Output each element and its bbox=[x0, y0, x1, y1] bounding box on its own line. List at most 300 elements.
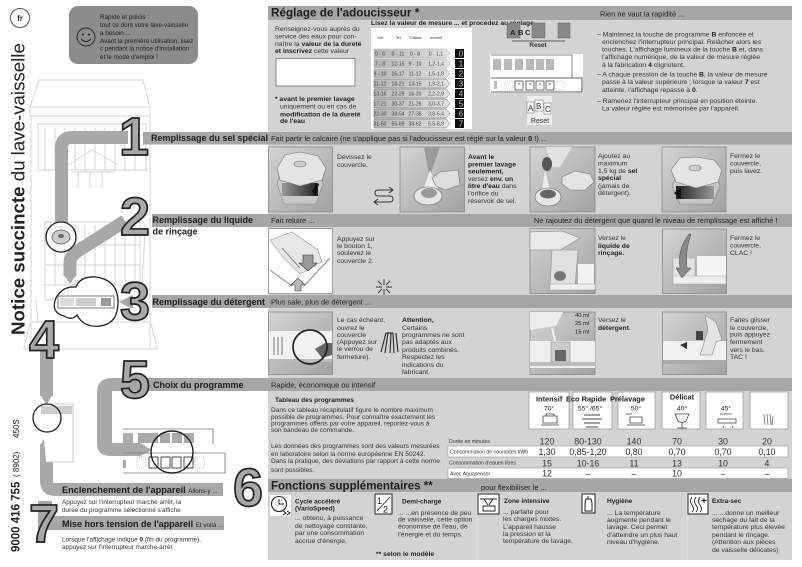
program data table: Durée en minutes bbox=[449, 439, 490, 445]
step: power off: Mise hors tension de l'appareil Et voilà ... bbox=[62, 519, 224, 529]
hardness table: 18-21 bbox=[391, 82, 405, 88]
part number: ( 8902) bbox=[12, 451, 21, 477]
text: close lid bbox=[730, 235, 761, 257]
program cards bbox=[529, 392, 788, 429]
text: add water: seulement, bbox=[468, 168, 504, 176]
hardness table: 5 bbox=[459, 100, 464, 108]
function: hygiène: ... La température bbox=[607, 510, 661, 517]
hardness table: 6 bbox=[459, 110, 464, 118]
photo: measure detergent: 40 ml bbox=[575, 313, 589, 319]
function: cycle accéléré bbox=[270, 495, 368, 545]
softener intro text: Renseignez-vous auprès du bbox=[275, 26, 360, 33]
right panel background bbox=[268, 6, 792, 560]
header: softener bbox=[268, 6, 792, 20]
section 6: extra functions header: Fonctions supplémentaires ** bbox=[271, 480, 433, 492]
text: open lid: ouvrez le bbox=[337, 325, 365, 332]
softener instructions: – Maintenez la touche de programme B enfoncée et bbox=[597, 32, 754, 38]
softener instructions bbox=[597, 32, 768, 112]
text: attention: Respectez les bbox=[402, 354, 445, 361]
function: demi-charge: 2 bbox=[383, 504, 388, 514]
part number: 450S bbox=[12, 419, 21, 438]
softener intro text: et inscrivez cette valeur bbox=[275, 48, 350, 55]
hardness input box bbox=[276, 58, 355, 86]
hardness table: °Clarke bbox=[408, 35, 422, 40]
function: zone intensive bbox=[478, 494, 573, 545]
hardness table: 2 bbox=[459, 70, 464, 78]
dishwasher line drawing bbox=[24, 80, 157, 349]
program data table: 10 bbox=[672, 468, 682, 478]
text: attention bbox=[402, 317, 464, 376]
intro note: tout ce dont votre lave-vaisselle bbox=[100, 22, 189, 29]
program data table: 15 bbox=[542, 458, 552, 468]
function: zone intensive: L'appareil hausse bbox=[503, 524, 556, 531]
section 6: extra functions header: pour flexibiliser le ... bbox=[481, 483, 547, 492]
program table intro text bbox=[271, 397, 440, 474]
section 3: detergent bbox=[152, 295, 792, 308]
text: add salt: 1,5 kg de sel bbox=[598, 168, 637, 175]
softener instructions: touches. L'affichage lumineux de la touche B et, dans bbox=[602, 46, 764, 54]
callout: program panel bbox=[123, 429, 225, 473]
function: cycle accéléré: (VarioSpeed) bbox=[295, 506, 335, 512]
program table intro text: son bandeau de commande. bbox=[271, 427, 354, 434]
section 1: salt: Remplissage du sel spécial bbox=[151, 133, 268, 143]
photo: measure detergent bbox=[530, 312, 595, 374]
reset combination diagram: Reset bbox=[531, 118, 549, 125]
reset combination diagram: C bbox=[545, 105, 551, 114]
program data table: 10 bbox=[718, 458, 728, 468]
program data table: 140 bbox=[627, 436, 641, 446]
program cards: Prélavage bbox=[610, 394, 645, 404]
hardness table: 30-37 bbox=[391, 102, 405, 108]
text: close cap: puis lavez. bbox=[730, 168, 762, 175]
hardness table: 13-16 bbox=[373, 92, 387, 98]
step numerals: 2 bbox=[120, 187, 150, 247]
function: extra-sec: température plus élevée bbox=[712, 524, 785, 531]
text: pour detergent: détergent. bbox=[598, 325, 631, 332]
text: add water: litre d'eau dans bbox=[468, 183, 517, 190]
softener instructions: à la fabrication 4 clignotent. bbox=[602, 62, 685, 69]
hardness table: 3,0-3,7 bbox=[428, 102, 444, 108]
function divider lines bbox=[477, 493, 687, 560]
photo: press button bbox=[268, 228, 332, 294]
program data table: 0,80 bbox=[625, 447, 643, 457]
section 1: salt bbox=[143, 132, 792, 144]
text: press button bbox=[337, 236, 376, 265]
function: hygiène: d'atteindre un plus haut bbox=[607, 532, 678, 539]
language badge bbox=[10, 8, 30, 28]
text: attention: indications du bbox=[402, 362, 444, 369]
function: zone intensive: Zone intensive bbox=[504, 498, 550, 505]
hardness table: 9 - 10 bbox=[408, 62, 422, 68]
hardness table: 1,5-1,8 bbox=[428, 72, 444, 78]
text: attention: Attention, bbox=[402, 317, 434, 324]
function: demi-charge: économise de l'eau, de bbox=[398, 524, 468, 530]
function: cycle accéléré: ... obtenu, à puissance bbox=[295, 515, 364, 522]
text: press button: Appuyez sur bbox=[337, 236, 376, 243]
text: slide lid: Faites glisser bbox=[730, 317, 771, 324]
program data table: 0,85-1,20 bbox=[569, 447, 607, 457]
text: open lid: couvercle bbox=[337, 332, 366, 339]
text: attention: pas adaptés aux bbox=[402, 339, 452, 346]
hardness table: 3 bbox=[459, 80, 464, 88]
text: attention: Certains bbox=[402, 325, 428, 332]
program data table bbox=[448, 436, 788, 478]
step: power off: Lorsque l'affichage indique 0 (fin du programme), bbox=[62, 536, 201, 544]
function: hygiène: niveau d'hygiène. bbox=[607, 539, 660, 546]
step numerals: 1 bbox=[119, 107, 149, 167]
softener instructions: passe à la valeur supérieure ; lorsque la valeur 7 est bbox=[602, 79, 760, 86]
part number bbox=[10, 419, 22, 552]
photo: add salt bbox=[530, 147, 595, 212]
softener footnote: de l'eau bbox=[280, 118, 305, 125]
callout: dispenser cloud bbox=[54, 277, 118, 326]
step numerals: 6 bbox=[233, 458, 263, 518]
function: cycle accéléré: de nettoyage constante, bbox=[295, 523, 368, 530]
text: attention: fabricant. bbox=[402, 369, 430, 376]
softener instructions: enclenchez l'interrupteur principal. Relâcher alors les bbox=[602, 39, 762, 46]
hardness table: 21-26 bbox=[408, 102, 422, 108]
program data table: 11 bbox=[629, 458, 639, 468]
program data table: – bbox=[721, 468, 726, 478]
hardness table: 27-38 bbox=[408, 112, 422, 118]
step: power on bbox=[62, 485, 218, 514]
reset keys diagram: C bbox=[525, 28, 531, 37]
vertical title: Notice succincte du lave-vaisselle bbox=[8, 43, 28, 335]
intro note: c pendant la notice d'installation bbox=[100, 46, 190, 52]
function: zone intensive: les charges mixtes. bbox=[503, 516, 561, 523]
text: add water bbox=[468, 154, 517, 205]
hardness table heading: Lisez la valeur de mesure ... et procédez au réglage. bbox=[371, 20, 536, 27]
program table intro text: Dans ce tableau récapitulatif figure le nombre maximum bbox=[271, 407, 433, 414]
section 2: rinse aid bbox=[152, 214, 792, 236]
reset combination diagram: B bbox=[536, 102, 541, 111]
photo: pour water bbox=[400, 147, 464, 212]
header: softener: Réglage de l'adoucisseur * bbox=[271, 6, 420, 20]
section 2: rinse aid: Fait reluire ... bbox=[271, 216, 314, 225]
program table intro text: Tableau des programmes bbox=[275, 397, 354, 404]
text: open lid: le verrou de bbox=[337, 346, 373, 353]
program data table: 10-16 bbox=[577, 458, 599, 468]
hardness table: 17-21 bbox=[373, 102, 387, 108]
program data table: 13 bbox=[672, 458, 682, 468]
text: slide lid: puis appuyez bbox=[730, 332, 771, 338]
step numerals: 3 bbox=[120, 272, 150, 332]
hardness table: 22-30 bbox=[373, 112, 387, 118]
step: power on: Appuyez sur l'interrupteur marche arrêt, la bbox=[62, 499, 182, 506]
hardness table: 3,8-5,4 bbox=[428, 112, 444, 118]
program cards: Intensif bbox=[536, 394, 563, 404]
program table intro text: Les données des programmes sont des valeurs mesurées bbox=[271, 443, 440, 450]
hardness table: °fH bbox=[395, 35, 401, 40]
hardness table: 13-15 bbox=[408, 82, 422, 88]
function: extra-sec bbox=[688, 494, 785, 554]
function: demi-charge: l'énergie et du temps. bbox=[398, 532, 463, 538]
step: power on: Enclenchement de l'appareil Allons-y ... bbox=[62, 485, 218, 495]
softener intro text bbox=[275, 26, 362, 55]
text: attention: produits combinés. bbox=[402, 347, 459, 354]
text: pour detergent: Versez le bbox=[598, 317, 626, 324]
text: add salt bbox=[598, 153, 637, 197]
softener footnote: * avant le premier lavage bbox=[275, 96, 355, 103]
text: add salt: spécial bbox=[598, 175, 621, 182]
program cards: 40° bbox=[677, 404, 687, 412]
hardness table: 0 bbox=[459, 50, 464, 58]
program data table: 20 bbox=[762, 436, 772, 446]
program cards: 50° bbox=[631, 404, 641, 412]
text: press button: soulevez le bbox=[337, 250, 371, 257]
softener instructions: – A chaque pression de la touche B, la valeur de mesure bbox=[597, 72, 768, 78]
function: zone intensive: la pression et la bbox=[503, 531, 551, 538]
text: attention: programmes ne sont bbox=[402, 332, 464, 339]
program data table: 80-130 bbox=[574, 436, 602, 446]
program data table: 0,10 bbox=[758, 447, 776, 457]
step numerals: 4 bbox=[29, 310, 59, 370]
program data table: Consommation d'eauen litres bbox=[449, 460, 516, 466]
intro note: et le mode d'emploi ! bbox=[100, 54, 158, 61]
program table intro text: sont possibles. bbox=[271, 467, 314, 474]
hardness table: 0 - 6 bbox=[375, 52, 385, 58]
hardness table: 38-54 bbox=[391, 112, 405, 118]
language badge: fr bbox=[17, 14, 23, 23]
photo: close lid bbox=[662, 229, 726, 294]
photo: close cap bbox=[662, 147, 726, 212]
section 5: program: Rapide, économique ou intensif bbox=[271, 380, 376, 390]
header: softener: Rien ne vaut la rapidité ... bbox=[600, 10, 684, 18]
function: hygiène: augmente pendant le bbox=[607, 517, 671, 524]
photo: pour rinse aid bbox=[530, 228, 595, 294]
function: cycle accéléré: par une consommation bbox=[295, 530, 364, 537]
program table intro text: programmes offerts par votre appareil, reportez-vous à bbox=[271, 420, 430, 428]
hardness table: 2,2-2,9 bbox=[428, 92, 444, 98]
section 2: rinse aid: de rinçage bbox=[152, 226, 198, 236]
hardness table: 1,9-2,1 bbox=[428, 82, 444, 88]
section 1: salt: Fait partir le calcaire (ne s'applique pas si l'adoucisseur est réglé sur la valeur 0 !) ... bbox=[271, 134, 547, 143]
photo: unscrew cap bbox=[268, 147, 332, 212]
photo: measure detergent: 25 ml bbox=[575, 321, 589, 327]
text: add water: l'orifice du bbox=[468, 190, 499, 198]
hardness table: °dH bbox=[377, 35, 383, 40]
text: open lid: (Appuyez sur bbox=[337, 339, 378, 346]
icon: repeat arrows bbox=[374, 187, 393, 205]
intro note: Avant la première utilisation, lisez bbox=[100, 38, 193, 45]
program data table: – bbox=[765, 468, 770, 478]
text: unscrew: Dévissez le bbox=[337, 154, 372, 161]
hardness table: 7 bbox=[459, 120, 464, 128]
reset combination diagram: A bbox=[528, 104, 534, 113]
function: extra-sec: de vaisselle délicates) bbox=[712, 547, 778, 554]
hardness table: 7 - 8 bbox=[375, 62, 385, 68]
program cards: Délicat bbox=[670, 392, 695, 402]
control panel diagram bbox=[490, 54, 583, 93]
text: add water: Avant le bbox=[468, 154, 494, 161]
hardness table: mmol/l bbox=[430, 35, 442, 40]
text: close cap bbox=[730, 153, 762, 175]
hardness table bbox=[371, 28, 472, 129]
function: zone intensive: température de lavage. bbox=[503, 538, 573, 545]
text: close lid: Fermez le bbox=[730, 235, 760, 242]
program data table: 0,70 bbox=[668, 447, 686, 457]
program data table: 4 bbox=[765, 458, 770, 468]
text: close lid: couvercle, bbox=[730, 242, 761, 250]
text: pour rinse aid bbox=[598, 235, 630, 257]
hardness table: 12-15 bbox=[391, 62, 405, 68]
function: hygiène bbox=[582, 494, 678, 546]
program data table: 1,30 bbox=[538, 447, 556, 457]
text: add water: réservoir de sel. bbox=[468, 198, 516, 205]
text: close cap: Fermez le bbox=[730, 153, 760, 160]
step numerals bbox=[29, 107, 263, 554]
text: slide lid: le couvercle, bbox=[730, 325, 768, 332]
intro note: a besoin ... bbox=[100, 30, 131, 37]
function: extra-sec: séchage du fait de la bbox=[712, 517, 775, 524]
softener footnote bbox=[275, 96, 361, 125]
text: open lid: Le cas échéant, bbox=[337, 317, 385, 324]
hardness table: 22-29 bbox=[391, 92, 405, 98]
softener instructions: – Ramenez l'interrupteur principal en position éteinte. bbox=[597, 98, 757, 105]
text: pour rinse aid: liquide de bbox=[598, 243, 630, 250]
program cards: 70° bbox=[544, 404, 554, 412]
text: close cap: couvercle, bbox=[730, 160, 761, 168]
step numerals: 7 bbox=[29, 494, 59, 554]
softener footnote: uniquement ou en cas de bbox=[280, 104, 357, 110]
section 5: program: Choix du programme bbox=[153, 380, 244, 390]
hardness table: 4 bbox=[459, 90, 464, 98]
reset keys diagram: B bbox=[518, 28, 524, 37]
hardness table: 9 - 10 bbox=[373, 72, 387, 78]
text: add salt: Ajoutez au bbox=[598, 153, 630, 160]
text: unscrew bbox=[337, 154, 372, 169]
step numerals: 5 bbox=[120, 350, 150, 410]
text: add water: premier lavage bbox=[468, 162, 516, 168]
icon: sparkle bbox=[376, 279, 392, 295]
photo: measure detergent: 15 ml bbox=[575, 330, 589, 336]
program table intro text: Dans la pratique, des déviations par rapport à cette norme bbox=[271, 458, 440, 465]
text: open lid: fermeture). bbox=[337, 354, 370, 361]
callout: power switch diagram bbox=[33, 404, 73, 462]
program cards: Eco Rapide bbox=[566, 394, 606, 404]
part number: 9000 416 755 bbox=[10, 481, 22, 552]
hardness table: 0 - 8 bbox=[410, 52, 420, 58]
program data table: 70 bbox=[672, 436, 682, 446]
program data table: 30 bbox=[718, 436, 728, 446]
reset keys diagram: Reset bbox=[529, 42, 547, 49]
hardness table: 11-12 bbox=[374, 82, 386, 88]
function: cycle accéléré: accrue d'énergie. bbox=[295, 538, 347, 545]
program table intro text: possible de programmes. Pour connaître exactement les bbox=[271, 414, 436, 421]
hardness table: 11-12 bbox=[409, 72, 421, 78]
text: press button: le bouton 1, bbox=[337, 243, 373, 250]
footnote: model: ** selon le modèle bbox=[376, 551, 434, 558]
icon: detergent tablets bbox=[381, 333, 398, 353]
function: hygiène: Hygiène bbox=[607, 498, 633, 505]
function: demi-charge: de vaisselle, cette option bbox=[398, 516, 473, 524]
text: pour rinse aid: Versez le bbox=[598, 235, 626, 242]
text: pour detergent bbox=[598, 317, 631, 332]
section 3: detergent: Plus sale, plus de détergent ... bbox=[271, 298, 371, 306]
function: zone intensive: ... parfaite pour bbox=[503, 509, 549, 516]
softener intro text: naître la valeur de la dureté bbox=[275, 41, 362, 48]
text: add water: versez env. un bbox=[468, 176, 513, 183]
function: extra-sec: pendant le rinçage. bbox=[712, 532, 770, 539]
program data table: Consommation de courantes kWh bbox=[450, 450, 528, 456]
program data table: 12 bbox=[542, 468, 552, 478]
text: close lid: CLAC ! bbox=[730, 250, 752, 257]
softener instructions: La valeur réglée est mémorisée par l'appareil. bbox=[602, 106, 740, 112]
text: open lid bbox=[337, 317, 385, 361]
reset combination diagram bbox=[527, 96, 552, 125]
text: slide lid: vers le bas. bbox=[730, 347, 765, 354]
step: power off: appuyez sur l'interrupteur marche-arrêt bbox=[62, 544, 172, 551]
step: power off bbox=[62, 519, 224, 551]
text: add salt: détergent). bbox=[598, 190, 631, 197]
hardness table: 16-20 bbox=[408, 92, 422, 98]
hardness table: 1,2-1,4 bbox=[428, 62, 444, 68]
reset keys diagram: A bbox=[510, 28, 516, 37]
section 2: rinse aid: Ne rajoutez du détergent que quand le niveau de remplissage est affiché ! bbox=[534, 216, 777, 225]
photo: open detergent lid bbox=[268, 312, 332, 374]
softener footnote: modification de la dureté bbox=[280, 112, 361, 118]
function: cycle accéléré: Cycle accéléré bbox=[295, 498, 341, 506]
program data table: – bbox=[586, 468, 591, 478]
text: unscrew: couvercle. bbox=[337, 162, 368, 169]
step: power on: durée du programme sélectionné s'affiche bbox=[62, 507, 181, 514]
step connector paths bbox=[38, 138, 224, 530]
softener intro text: service des eaux pour con- bbox=[275, 34, 357, 40]
callout: salt cap circle bbox=[46, 222, 76, 252]
text: pour rinse aid: rinçage. bbox=[598, 250, 624, 257]
function: demi-charge: 1 bbox=[377, 496, 382, 506]
text: add salt: maximum bbox=[598, 160, 628, 168]
section 2: rinse aid: Remplissage du liquide bbox=[152, 215, 253, 225]
function: demi-charge: Demi-charge bbox=[402, 498, 442, 506]
section 3: detergent: Remplissage du détergent bbox=[152, 297, 265, 307]
program data table: – bbox=[632, 468, 637, 478]
hardness table: 16-17 bbox=[391, 72, 405, 78]
hardness table: 31-50 bbox=[373, 122, 387, 128]
program table intro text: en laboratoire selon la norme européenne EN 50242. bbox=[271, 451, 426, 458]
text: add salt: (jamais de bbox=[598, 183, 630, 190]
program cards: 55° /65° bbox=[578, 404, 602, 412]
program data table: 0,70 bbox=[714, 447, 732, 457]
program data table: 120 bbox=[540, 436, 554, 446]
hardness table: 1 bbox=[459, 60, 464, 68]
text: press button: couvercle 2. bbox=[337, 258, 374, 265]
hardness table: 55-89 bbox=[391, 122, 405, 128]
photo: slide lid bbox=[662, 312, 726, 374]
section 5: program bbox=[130, 378, 792, 391]
text: slide lid: fermement bbox=[730, 339, 763, 346]
function: hygiène: lavage. Ceci permet bbox=[607, 524, 668, 531]
softener instructions: atteinte, l'affichage repasse à 0. bbox=[602, 87, 698, 94]
function: demi-charge: ... ...en présence de peu bbox=[398, 510, 472, 517]
softener instructions: l'affichage numérique, de la valeur de mesure réglée bbox=[602, 54, 760, 61]
intro note bbox=[69, 6, 198, 64]
text: slide lid: TAC ! bbox=[730, 354, 747, 361]
program cards: 45° bbox=[721, 404, 731, 412]
hardness table: 5,5-8,9 bbox=[428, 122, 444, 128]
function: demi-charge bbox=[375, 494, 473, 538]
function: extra-sec: Extra-sec bbox=[712, 498, 742, 505]
function: extra-sec: ... ...donne un meilleur bbox=[712, 510, 780, 517]
reset keys diagram bbox=[507, 23, 570, 49]
intro note: Rapide et précis : bbox=[100, 14, 149, 21]
hardness table: 39-62 bbox=[408, 122, 422, 128]
hardness table: 0 - 11 bbox=[392, 52, 404, 58]
text: slide lid bbox=[730, 317, 771, 361]
section 6: extra functions header bbox=[268, 479, 792, 492]
function: extra-sec: (Attention aux pièces bbox=[712, 539, 776, 546]
program data table: Avec Aquasensor bbox=[450, 472, 491, 478]
